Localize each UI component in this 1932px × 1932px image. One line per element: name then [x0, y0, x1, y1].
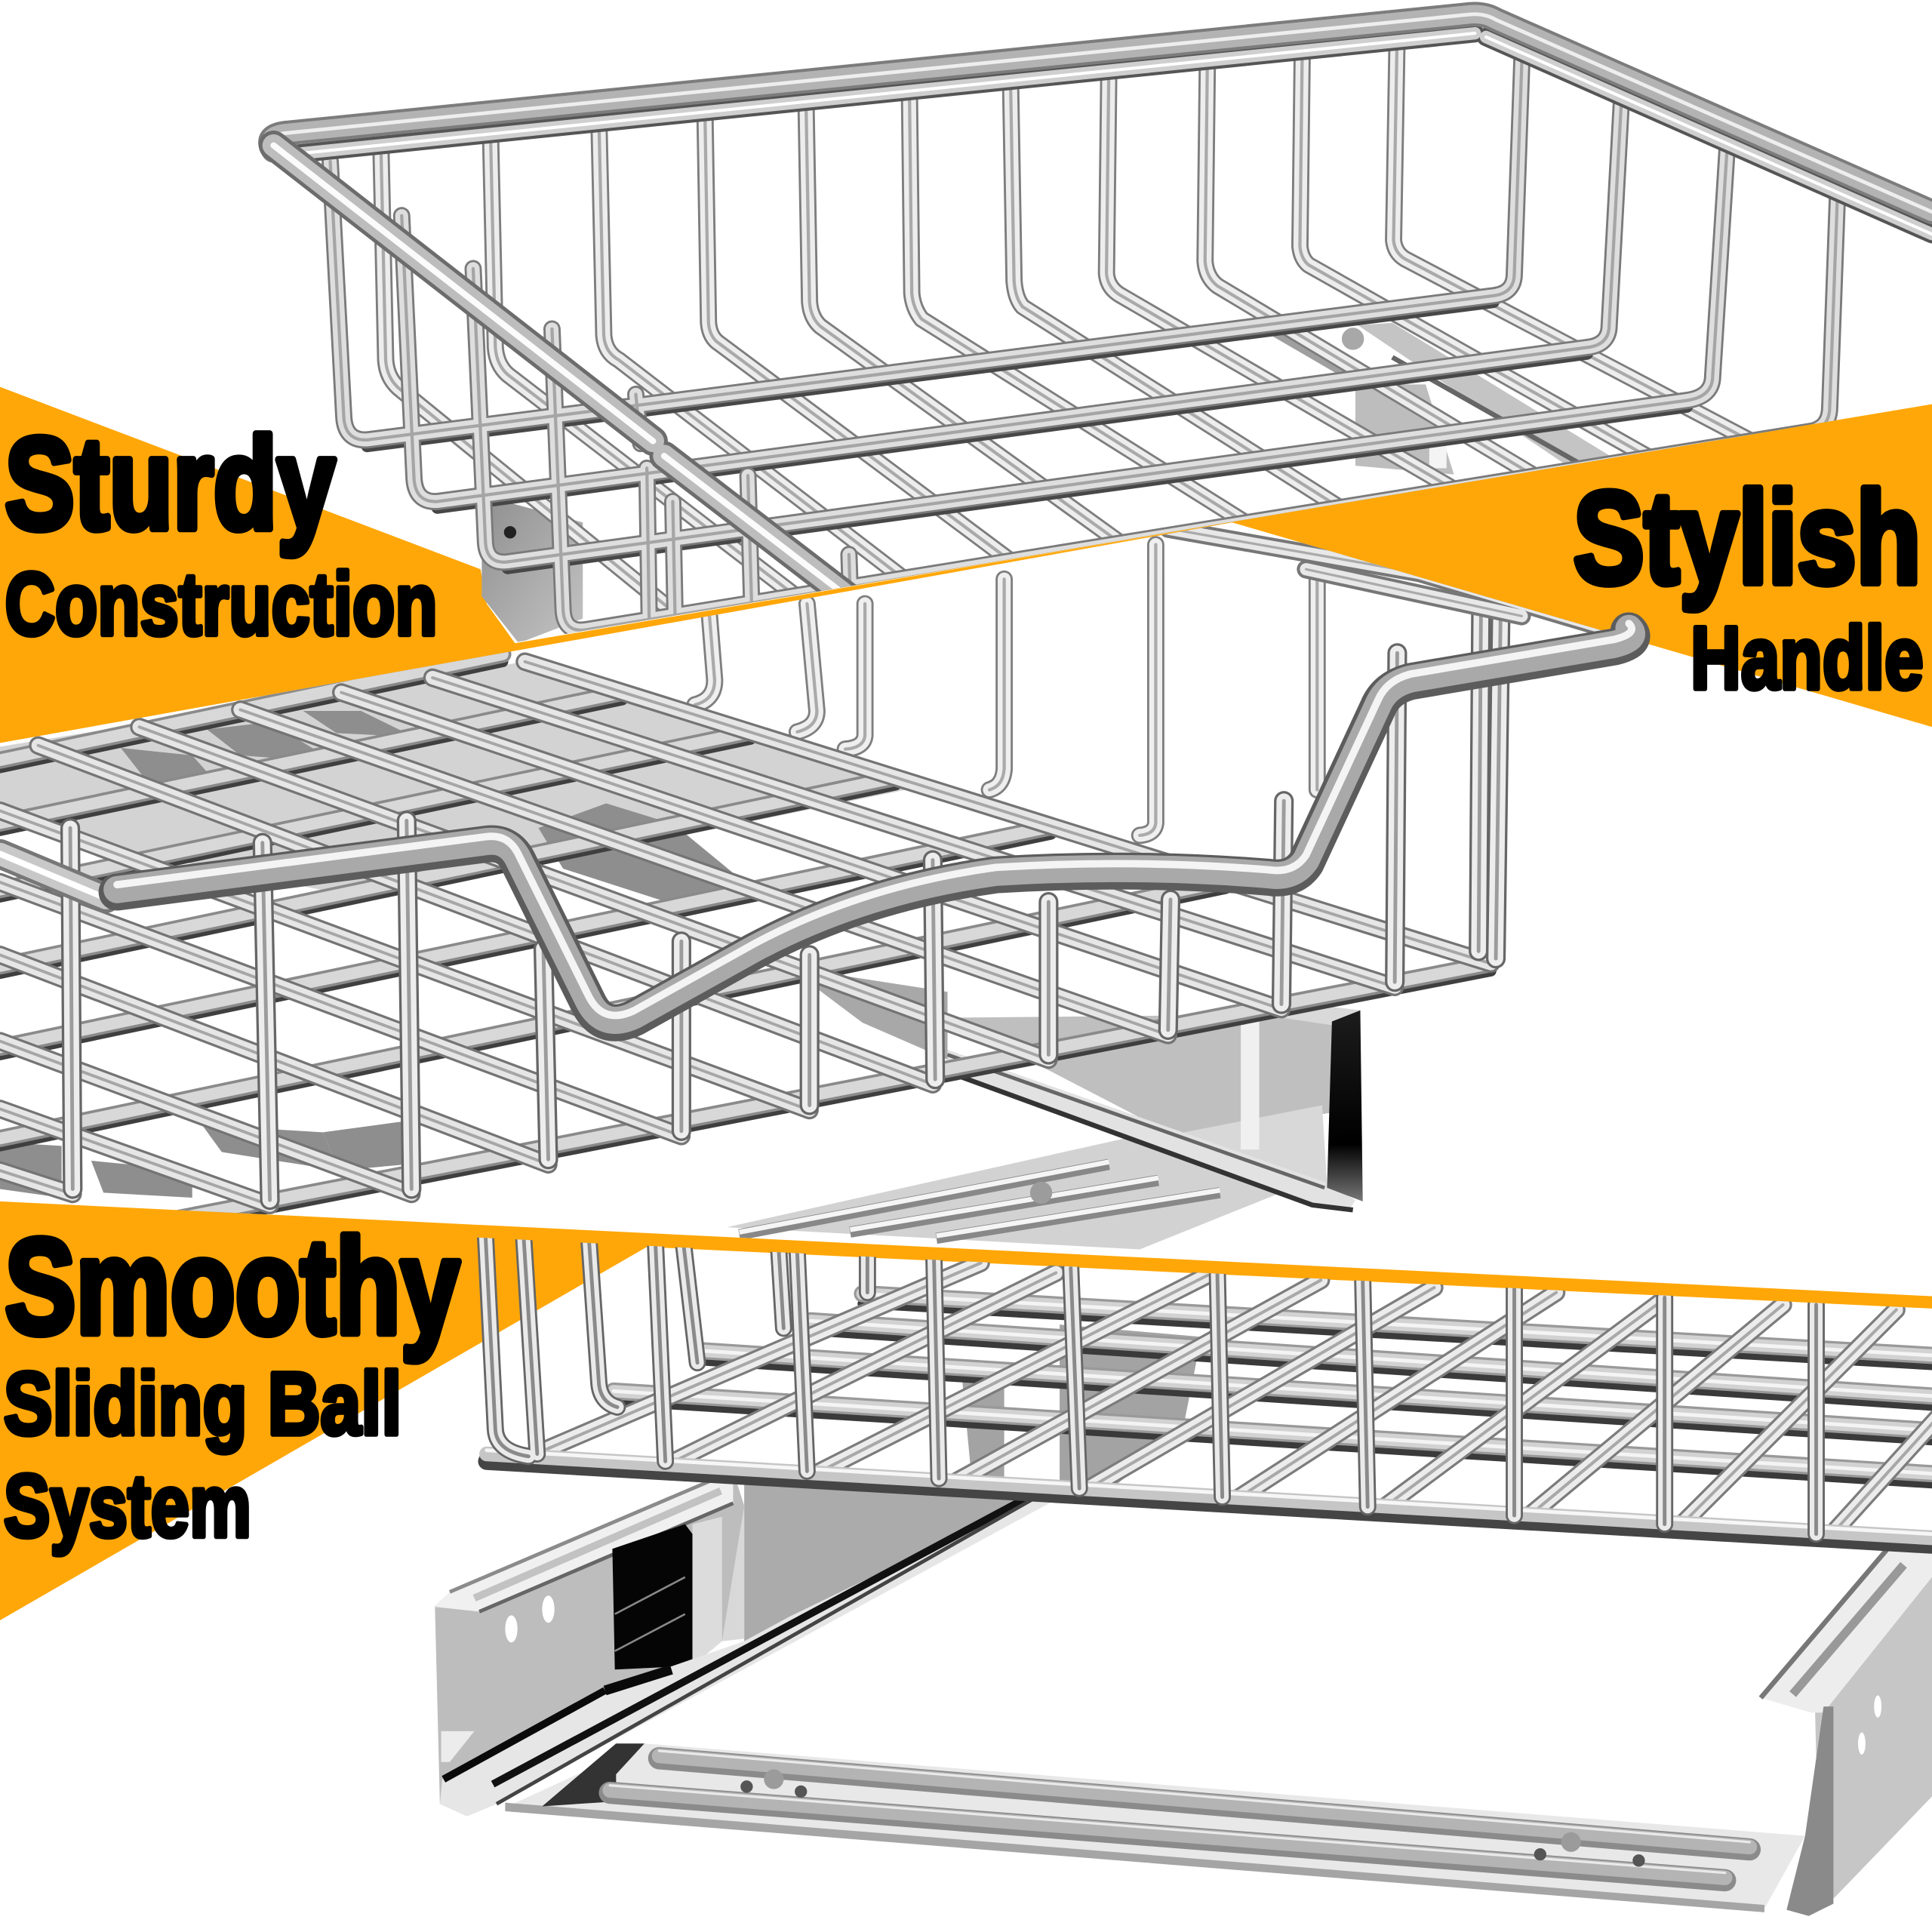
top rim — [270, 14, 1932, 212]
floor row undersides — [0, 662, 1491, 1260]
front bottom rod — [487, 1451, 1932, 1545]
stylish handle — [117, 623, 1632, 1023]
floor underlay — [0, 662, 912, 900]
subheading: System: System — [4, 1457, 251, 1555]
label: Stylish Handle — [1574, 464, 1924, 708]
label: Sturdy Construction — [5, 410, 438, 654]
inner rim — [294, 33, 1932, 234]
floor diagonal wires — [547, 1263, 1932, 1537]
floor cross rows — [614, 1294, 1932, 1474]
top wire basket — [270, 14, 1932, 666]
tray base and rods — [505, 1743, 1805, 1912]
middle wire basket — [0, 528, 1626, 1260]
thick front rod — [273, 146, 851, 598]
floor plates — [0, 711, 750, 1198]
left rim rod — [0, 854, 106, 898]
subheading: Sliding Ball: Sliding Ball — [4, 1354, 401, 1453]
floor row undersides — [614, 1303, 1932, 1484]
panel: lower orange banner — [0, 1201, 1932, 1620]
slide rail and end slot — [789, 968, 1363, 1210]
back and floor wires — [372, 50, 1755, 616]
heading: Smoothy: Smoothy — [5, 1211, 460, 1363]
front uprights — [485, 1235, 1817, 1534]
plates visible through bottom basket — [961, 1324, 1201, 1497]
back rim — [1168, 528, 1626, 635]
heading: Sturdy: Sturdy — [5, 410, 335, 556]
panel: upper orange banner — [0, 387, 1232, 743]
subheading: Construction: Construction — [5, 555, 438, 654]
dark undersides of floor rows — [368, 302, 1811, 635]
left slide rail — [434, 1471, 1072, 1817]
panel: right orange banner — [518, 405, 1932, 727]
back wall wires — [695, 545, 1317, 835]
right slide rail — [1761, 1540, 1932, 1916]
floor cross rows — [0, 654, 1491, 1253]
floor long wires — [0, 662, 1491, 1205]
label: Smoothy Sliding Ball System — [4, 1211, 460, 1555]
lower tray fragment — [727, 1137, 1284, 1250]
front uprights — [70, 604, 1501, 1200]
U-shaped side wires — [331, 31, 1838, 631]
slide rail under top basket — [481, 323, 1614, 643]
bottom wire basket and rails — [434, 1235, 1932, 1916]
